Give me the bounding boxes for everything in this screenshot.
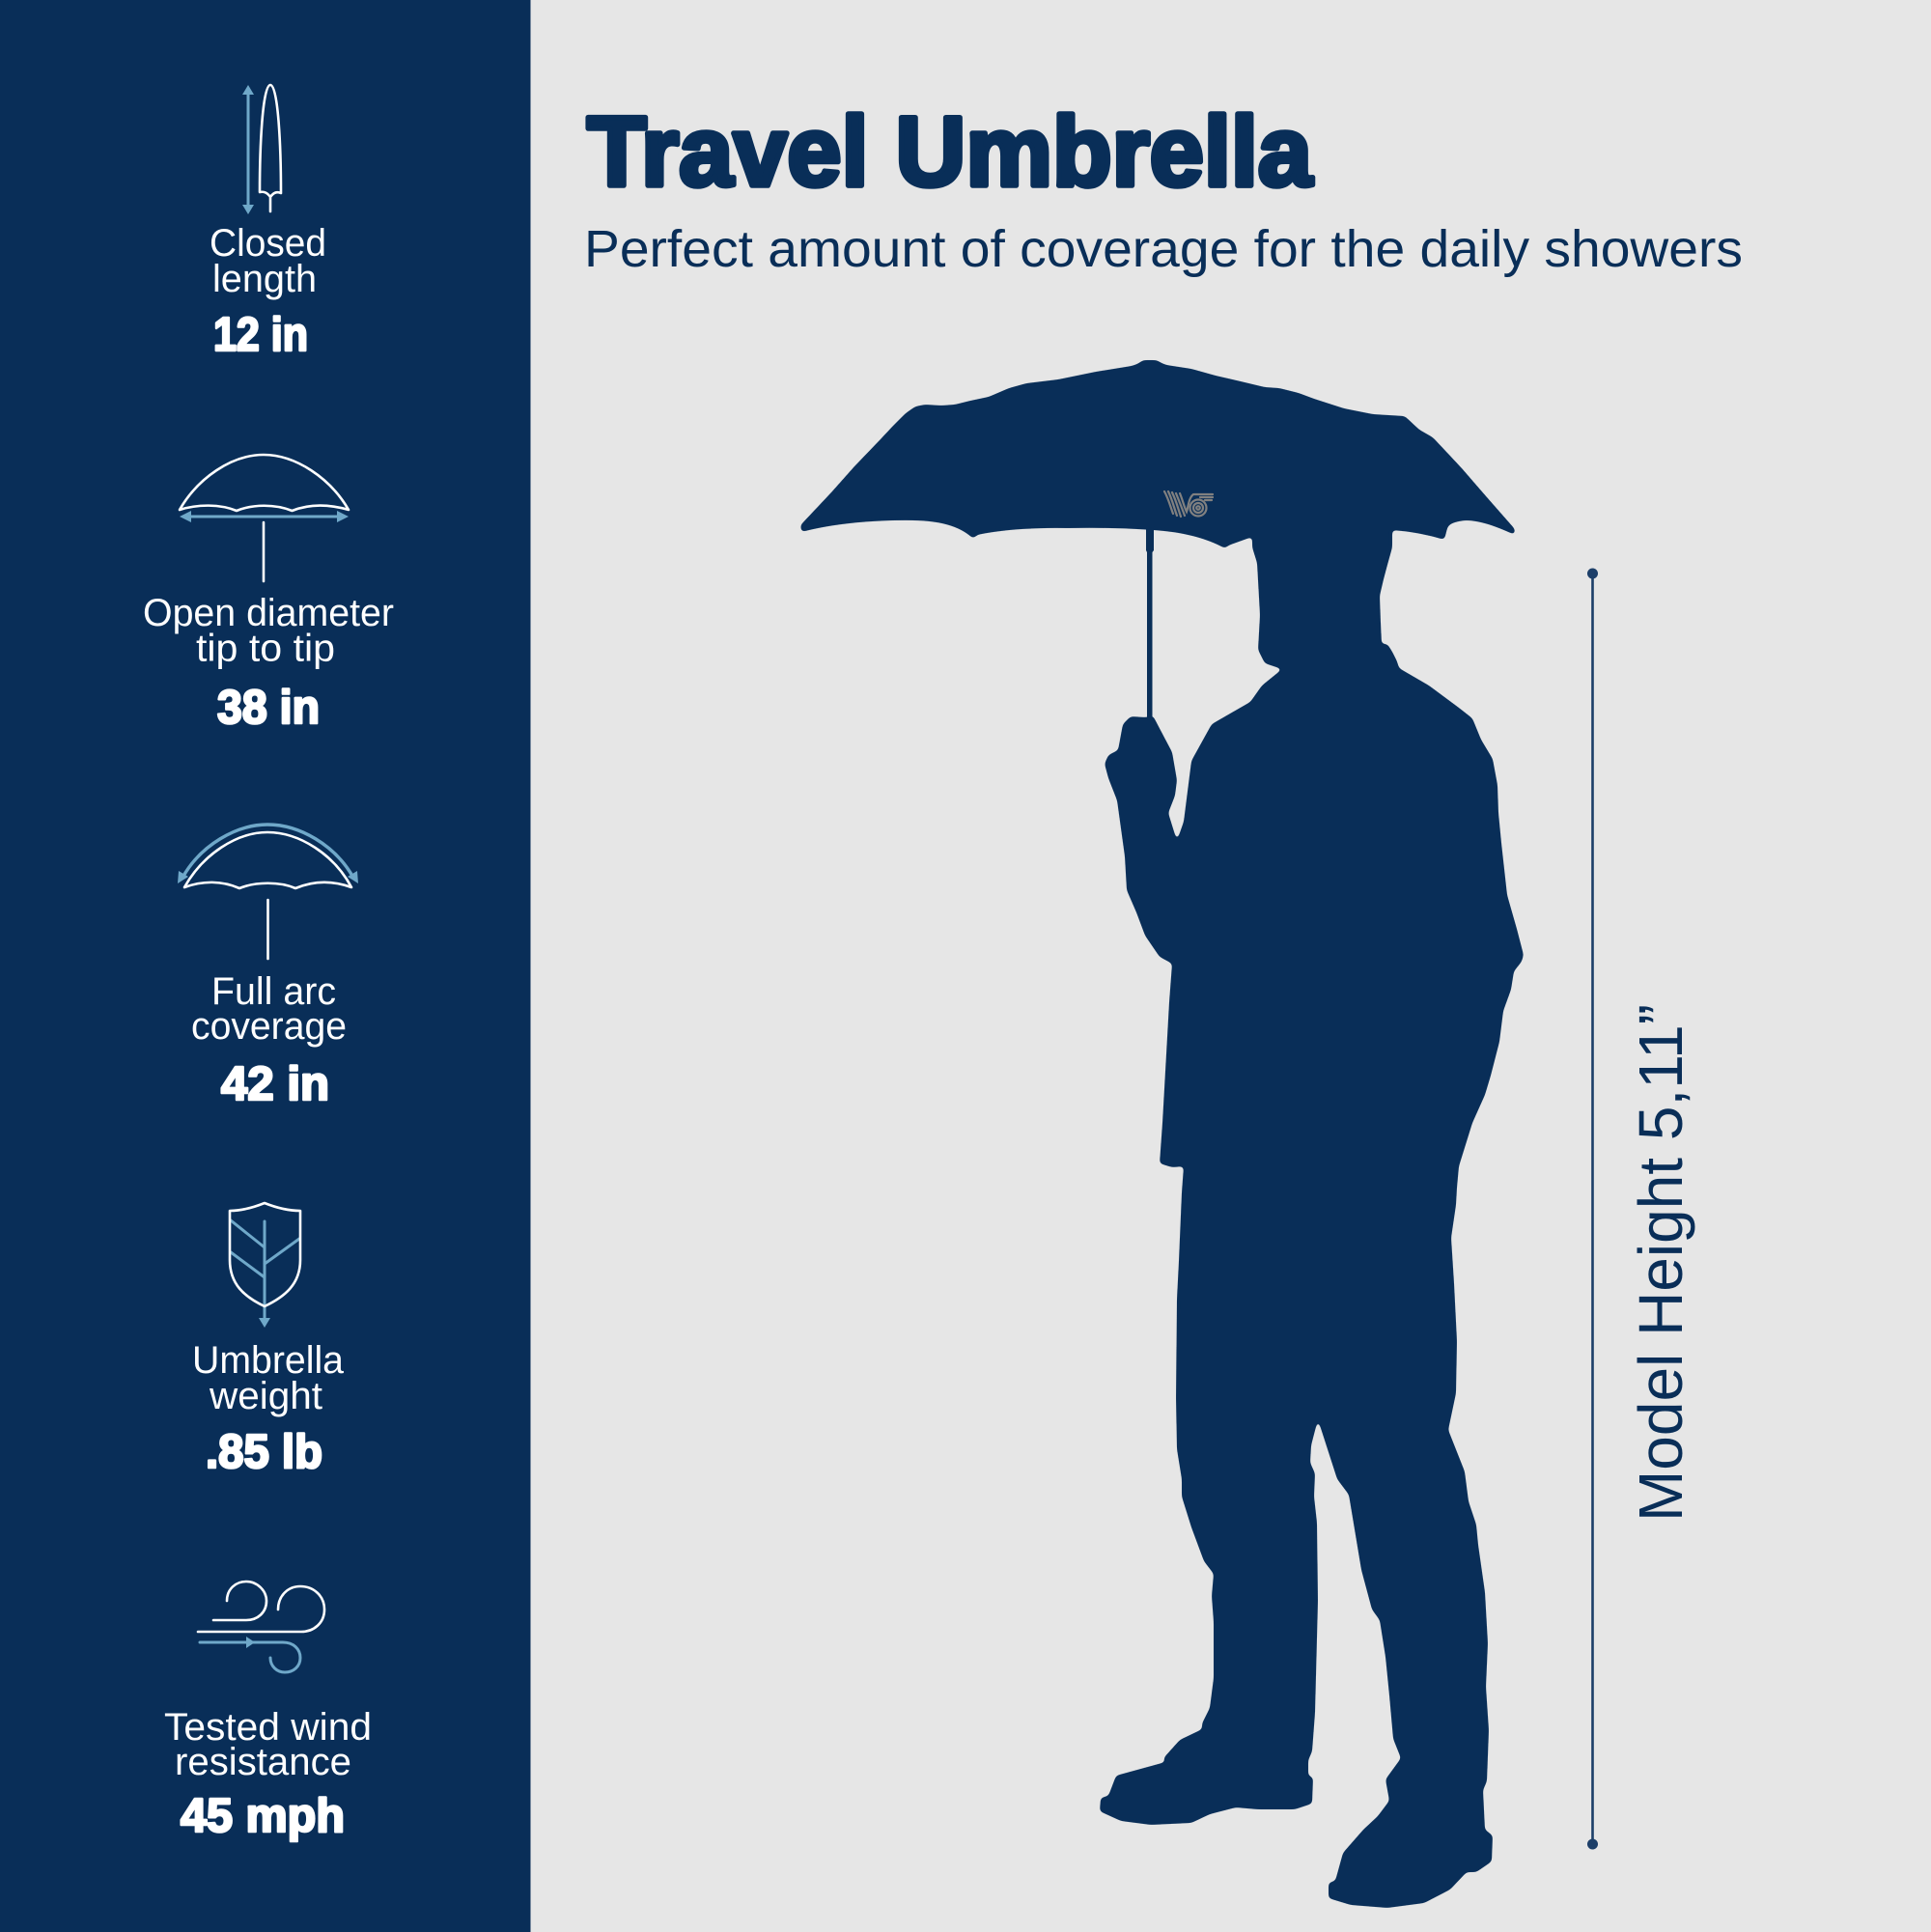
panel: specs sidebar [0,0,531,1932]
rotated label: model height: Model Height 5,11” [1626,1004,1695,1522]
label: umbrella weight: weight [209,1375,322,1417]
spec: closed length [210,85,326,361]
umbrella handle [1146,526,1154,719]
icon: closed umbrella with length arrow [242,85,281,214]
label: open diameter: Open diameter [143,592,394,634]
value: .85 lb: .85 lb [206,1426,322,1478]
spec: open diameter [143,455,394,734]
value: 45 mph: 45 mph [181,1790,345,1842]
icon: wind swirls [198,1582,324,1672]
label: umbrella weight: Umbrella [192,1339,345,1382]
title: Travel Umbrella [587,97,1313,207]
value: 12 in: 12 in [213,309,308,361]
value: 38 in: 38 in [217,682,320,734]
label: closed length: length [212,258,317,300]
label: wind resistance: resistance [175,1741,351,1783]
spec: full arc coverage [178,825,358,1110]
label: open diameter: tip to tip [196,628,335,670]
label: closed length: Closed [210,222,326,265]
height measure line [1587,568,1598,1850]
icon: open umbrella with arc arrow [178,825,358,959]
man and umbrella canopy [800,360,1524,1908]
icon: open umbrella with diameter arrow [180,455,349,581]
spec: wind resistance [164,1582,372,1842]
label: full arc coverage: coverage [191,1005,347,1048]
subtitle: Perfect amount of coverage for the daily showers [584,220,1743,278]
icon: shield with leaf and down arrow [230,1203,300,1328]
label: full arc coverage: Full arc [211,970,336,1013]
spec: umbrella weight [192,1203,345,1478]
label: wind resistance: Tested wind [164,1706,372,1749]
umbrella logo [1164,491,1213,517]
silhouette: man holding umbrella [800,360,1524,1908]
value: 42 in: 42 in [221,1058,329,1110]
